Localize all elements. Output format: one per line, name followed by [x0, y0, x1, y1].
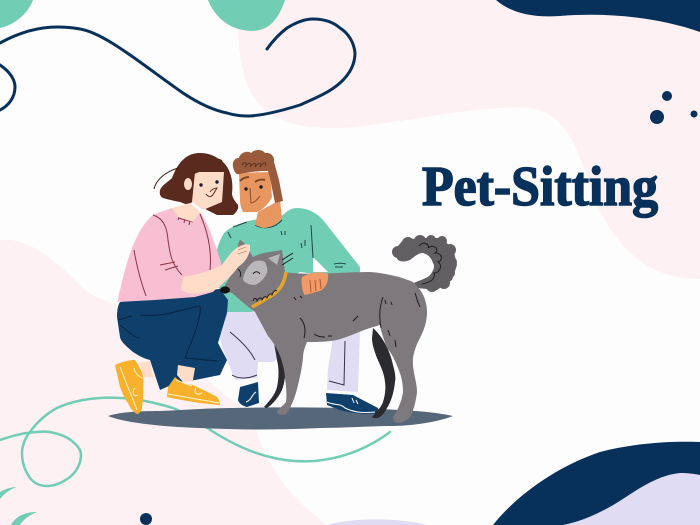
- decorative dots: top right: [650, 91, 698, 124]
- dog: far hind leg: [372, 328, 395, 418]
- dog: nose: [220, 286, 230, 294]
- woman: left yellow shoe: [115, 360, 143, 414]
- dog: face patch: [243, 260, 267, 285]
- woman: arm and hand: [181, 244, 250, 294]
- man: green sweater: [216, 208, 360, 312]
- lavender blob: bottom center: [327, 519, 427, 525]
- background blob: top pink: [238, 0, 700, 279]
- woman: windswept hair strand: [154, 168, 178, 189]
- dog: yellow collar: [252, 272, 286, 307]
- background blob: bottom-left pink: [0, 240, 327, 525]
- man: left shoe: [238, 382, 259, 407]
- dog: fur marks: [294, 293, 420, 347]
- man: curly hair: [233, 150, 283, 203]
- navy squiggle: top: [0, 19, 355, 116]
- dog: body: [225, 240, 427, 423]
- man: left trouser leg: [220, 310, 300, 380]
- woman: neck: [172, 203, 200, 222]
- title: Pet-Sitting: [422, 156, 658, 218]
- woman: navy trousers: [117, 289, 228, 390]
- man: head: [239, 172, 272, 212]
- teal squiggle: bottom: [0, 398, 390, 486]
- woman: ear: [184, 178, 192, 190]
- teal accents: bottom left: [0, 487, 37, 525]
- man: face: [240, 177, 265, 203]
- ground shadow: [108, 407, 453, 430]
- teal blob: top left: [0, 0, 33, 28]
- dog: ear: [268, 254, 280, 265]
- woman: ankles: [140, 361, 153, 377]
- dog: far front leg: [264, 337, 285, 408]
- dog: curly tail: [392, 235, 457, 292]
- woman: right yellow shoe: [167, 377, 220, 405]
- man: gap between arm and torso: [313, 257, 328, 272]
- dog: neck fur: [253, 290, 277, 301]
- teal blob: top center: [208, 0, 285, 31]
- decorative dot: bottom: [140, 513, 152, 525]
- illustration: couple with dog: [108, 150, 457, 430]
- man: right trouser leg: [327, 330, 360, 392]
- woman: face: [192, 172, 224, 210]
- man: hand on dog: [302, 272, 328, 295]
- navy squiggle: left: [0, 65, 15, 110]
- lavender blob: bottom right: [563, 473, 700, 525]
- woman: pink sweater: [118, 208, 222, 302]
- man: neck: [255, 200, 282, 228]
- woman: back hair: [160, 153, 238, 215]
- navy blob: bottom right: [493, 442, 700, 525]
- man: right shoe: [326, 393, 378, 414]
- man: ear: [273, 188, 281, 198]
- navy blob: top right: [496, 0, 700, 32]
